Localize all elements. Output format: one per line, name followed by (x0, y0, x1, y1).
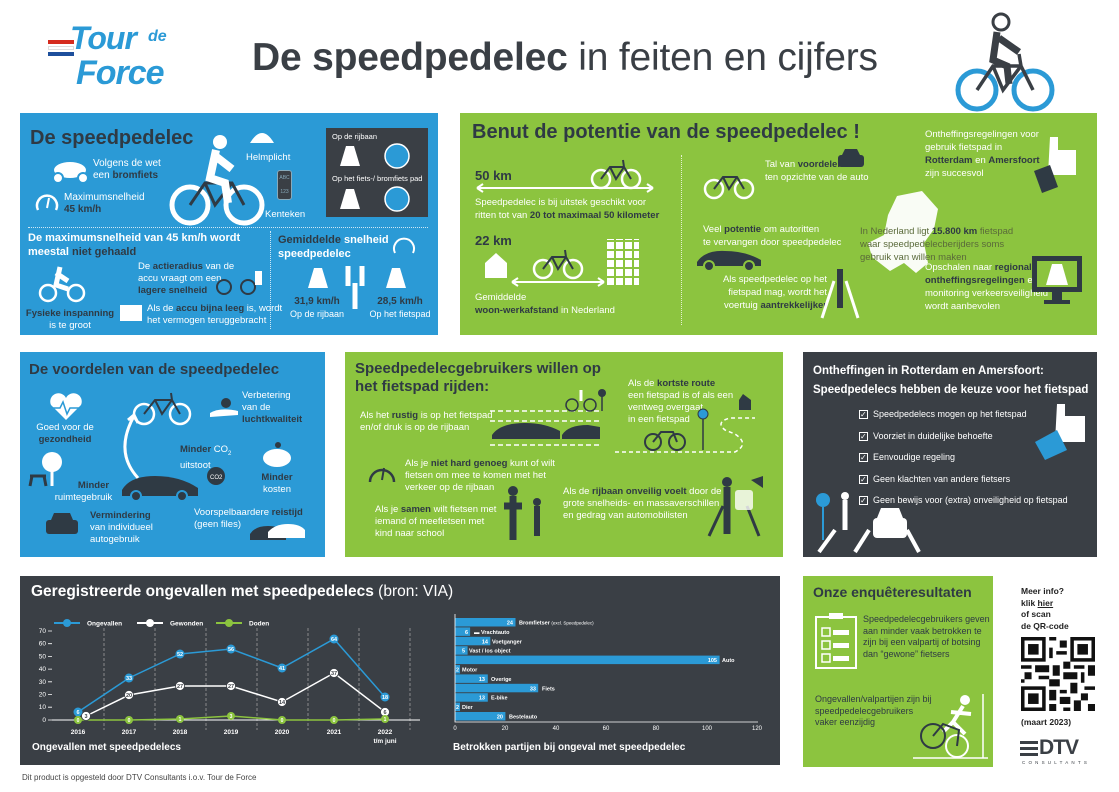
text: woon-werk: woon-werkafstand in Nederland (475, 305, 615, 316)
text: meer info: de QR-code (1021, 620, 1069, 630)
logo: DTV Consultants: DTV (1039, 736, 1078, 759)
heading (813, 362, 1088, 400)
legend (54, 619, 269, 628)
bar chart: 2 (456, 705, 459, 711)
line chart: 14 (279, 700, 286, 706)
line chart: 37 (331, 671, 337, 677)
text: meer info: Meer info? (1021, 586, 1064, 596)
heading: het fietspad rijden: (355, 378, 489, 395)
icon: helmet (250, 133, 274, 143)
heading: Ontheffingen in Rotterdam en Amersfoort: (813, 365, 1044, 377)
checklist: Geen bewijs voor (extra) onveiligheid op fietspad (873, 495, 1068, 505)
checklist: ✓ (860, 432, 867, 440)
text: minder CO2: Minder CO2 (180, 444, 231, 457)
line chart: 2016 (71, 729, 86, 736)
icon: thumbs up (1034, 137, 1076, 193)
icon: road 2 (386, 268, 406, 288)
icon: bike voordelen (132, 390, 192, 426)
bar chart: 24 (507, 620, 514, 626)
text: kortste route: in een fietspad (628, 414, 690, 425)
logo: Tour de Force: Tour (70, 20, 136, 56)
bar chart: 100 (702, 726, 713, 732)
panel: De voordelen (20, 352, 325, 557)
line chart: 41 (279, 666, 285, 672)
bar chart: ▬ Vrachtauto (474, 630, 510, 636)
icon: ebike (216, 271, 262, 295)
icon: monitor (1032, 256, 1084, 306)
text: 50 km desc: ritten tot van 20 tot maximaal 50 kilometer (475, 210, 659, 221)
text: ontheffingsregelingen: gebruik fietspad in (925, 142, 1002, 153)
bar chart: 6 (465, 630, 468, 636)
bar chart: 13 (479, 677, 485, 683)
icon: traffic jam (250, 522, 305, 544)
text: veel potentie: Veel potentie om autoritten (703, 224, 819, 235)
line chart: 0 (128, 718, 131, 724)
text: actieradius: lagere snelheid (138, 285, 207, 296)
line chart: 50 (39, 653, 46, 660)
line chart: 3 (84, 714, 88, 720)
text: enquete 1: Speedpedelecgebruikers geven (863, 614, 990, 624)
checklist (859, 404, 1068, 512)
text: fysieke inspanning: Fysieke inspanning (26, 308, 114, 319)
text: minder kosten (252, 472, 302, 496)
icon: license plate (277, 170, 292, 200)
text: niet hard genoeg: fietsen om mee te komen met het (405, 470, 546, 481)
bar chart: 0 (453, 726, 457, 732)
text: ruimtegebruik: ruimtegebruik (55, 492, 112, 503)
heading: Geregistreerde ongevallen met speedpedelecs (bron: VIA) (31, 583, 453, 600)
text: enquete 2 (815, 694, 932, 728)
line chart: 1 (384, 717, 387, 723)
text: meer info (1021, 586, 1069, 632)
text: gezondheid: gezondheid (39, 434, 91, 445)
icon: bike + arrow + car (697, 176, 761, 270)
bar chart: 80 (653, 726, 660, 732)
panel: enquêteresultaten (803, 576, 993, 767)
line chart: 2022 (378, 729, 393, 736)
checklist: ✓ (860, 474, 867, 484)
text: meer info: klik hier (1021, 598, 1053, 608)
text: luchtkwaliteit: luchtkwaliteit (242, 414, 302, 425)
text: ruimtegebruik (46, 480, 121, 504)
arrow: 50 km (476, 183, 654, 193)
text: kortste route: een fietspad is of als een (628, 390, 733, 401)
line chart: 20 (126, 693, 132, 699)
text: rustig: Als het rustig is op het fietspad (360, 410, 493, 421)
line chart: 27 (228, 684, 234, 690)
bar chart: 20 (502, 726, 509, 732)
text: enquete 1: aan minder vaak betrokken te (863, 626, 982, 636)
text: aantrekkelijker: fietspad mag, wordt het (728, 287, 827, 298)
text: onveilig: grote snelheids- en massaverschillen (563, 498, 719, 509)
checklist: Speedpedelecs mogen op het fietspad (873, 409, 1027, 419)
text: 15.800 km: waar speedpedelecberijders soms (860, 239, 1004, 250)
legend: Gewonden (170, 620, 203, 628)
heading: gemiddelde snelheid: Gemiddelde snelheid (278, 234, 389, 246)
checklist: Geen klachten van andere fietsers (873, 474, 1010, 484)
text: 50 km desc: Speedpedelec is bij uitstek geschikt voor (475, 197, 646, 208)
bar chart: Vast / los object (469, 649, 511, 655)
legend: Ongevallen (87, 620, 122, 628)
text: 28,5 (369, 296, 431, 319)
text: 50 km: 50 km (475, 168, 512, 183)
line chart (20, 576, 780, 765)
heading: De voordelen van de speedpedelec (29, 361, 279, 378)
line chart: 2018 (173, 729, 188, 736)
text: gezondheid: Goed voor de (36, 422, 94, 433)
text: actieradius: accu vraagt om een (138, 273, 221, 284)
checklist: ✓ (860, 496, 867, 505)
text: samen: iemand of meefietsen met (375, 516, 484, 527)
text: opschalen: Opschalen naar regionale (925, 262, 1037, 273)
icon: map NL (868, 191, 938, 273)
line chart: 0 (333, 718, 336, 724)
line chart: 20 (39, 692, 46, 698)
panel: Ontheffingen (803, 352, 1097, 557)
text: luchtkwaliteit: Verbetering (242, 390, 291, 401)
icon: route with bike (615, 394, 755, 456)
line chart: 30 (39, 679, 46, 686)
text: 28,5: 28,5 km/h (377, 296, 423, 307)
icon: license plate: 123 (280, 189, 289, 195)
text: veel potentie (703, 224, 842, 248)
heading: maximumsnelheid (28, 232, 240, 258)
icon: car front (838, 149, 864, 167)
icon: speedometer (36, 194, 58, 210)
heading: gemiddelde snelheid (278, 234, 389, 260)
icon: scooter (54, 162, 87, 182)
text: chart 2 caption: Betrokken partijen bij ongeval met speedpedelec (453, 742, 685, 753)
text: reistijd: (geen files) (194, 519, 241, 530)
text: niet hard genoeg (405, 458, 555, 494)
text: 15.800 km (860, 226, 1013, 263)
text: 22 km: 22 km (475, 233, 512, 248)
line chart: 56 (228, 647, 234, 653)
checklist: ✓ (860, 453, 867, 462)
text: onveilig (563, 486, 721, 522)
text: maart 2023: (maart 2023) (1021, 717, 1071, 727)
text: gezondheid (30, 422, 100, 446)
line chart: 2017 (122, 729, 137, 736)
icon: heart (48, 392, 84, 422)
icon: cyclists group (346, 266, 364, 309)
text: ruimtegebruik: Minder (78, 480, 109, 491)
text: max 45: 45 km/h (64, 204, 101, 215)
checklist: Voorziet in duidelijke behoefte (873, 430, 993, 440)
logo: Tour de Force: de (148, 28, 167, 45)
text: enquete 1: dan “gewone” fietsers (863, 648, 950, 658)
text: veel potentie: te vervangen door speedpedelec (703, 237, 841, 248)
text: opschalen: wordt aanbevolen (925, 301, 1000, 312)
line chart: 10 (39, 704, 46, 711)
text: ontheffingsregelingen: zijn succesvol (925, 168, 984, 179)
text: 15.800 km: gebruik van willen maken (860, 252, 967, 263)
icon: big cyclist (170, 135, 264, 226)
line chart: 2021 (327, 729, 342, 736)
heading: Benut de potentie van de speedpedelec ! (472, 121, 860, 143)
text: 28,5: Op het fietspad (369, 309, 431, 319)
text: ontheffingsregelingen: Ontheffingsregelingen voor (925, 129, 1039, 140)
panel: willen op het fietspad (345, 352, 783, 557)
text: opschalen: ontheffingsregelingen en (925, 275, 1038, 286)
icon: two cyclists (500, 486, 550, 542)
line chart: 70 (39, 628, 46, 635)
text: 15.800 km: In Nederland ligt 15.800 km fietspad (860, 226, 1013, 237)
bar chart: 13 (479, 696, 485, 702)
text: accu: het vermogen teruggebracht (147, 315, 266, 326)
text: 31,9 (290, 296, 344, 319)
text: rustig: en/of druk is op de rijbaan (360, 422, 469, 433)
bar chart: Voetganger (492, 639, 523, 645)
bar chart: 5 (462, 649, 465, 655)
line chart: 0 (42, 717, 46, 724)
box: road signs (326, 128, 428, 217)
icon: battery (120, 305, 142, 321)
checklist: Eenvoudige regeling (873, 452, 955, 462)
text: enquete 1: zijn bij een valpartij of botsing (863, 637, 981, 647)
text: voordelen auto (765, 159, 869, 183)
text: enquete 1 (863, 614, 990, 660)
icon: piggy bank (260, 442, 294, 468)
heading: De speedpedelec (30, 127, 193, 149)
text: opschalen: monitoring verkeersveiligheid (925, 288, 1048, 299)
text: samen (375, 504, 496, 540)
text: reistijd (194, 507, 303, 531)
icon: cyclist with horn (707, 476, 767, 538)
text: opschalen (925, 261, 1048, 313)
heading: Speedpedelecs hebben de keuze voor het fietspad (813, 384, 1088, 396)
checklist: ✓ (860, 410, 867, 419)
line chart: 52 (177, 652, 183, 658)
icon: road bike lane (815, 490, 920, 552)
text: niet hard genoeg: Als je niet hard genoeg kunt of wilt (405, 458, 555, 469)
bar chart: 2 (456, 668, 459, 674)
line chart: 2019 (224, 729, 239, 736)
icon: house (485, 253, 507, 278)
text: enquete 2: vaker eenzijdig (815, 717, 875, 727)
line chart: 0 (77, 718, 80, 724)
text: voordelen auto: Tal van voordelen (765, 159, 843, 170)
text: Helmplicht: Helmplicht (246, 152, 290, 163)
text: vermindering: autogebruik (90, 534, 140, 545)
text: woon-werk (475, 292, 615, 316)
icon: office building (607, 239, 639, 285)
text: chart 1 caption: Ongevallen met speedpedelecs (32, 742, 181, 753)
text: onveilig: en gedrag van automobilisten (563, 510, 688, 521)
text: bromfiets: een bromfiets (93, 170, 158, 181)
icon: road with cars (490, 387, 600, 447)
text: fysieke inspanning (26, 308, 114, 331)
line chart: 3 (230, 714, 233, 720)
text: vermindering: Vermindering (90, 510, 151, 521)
icon: cyclist lane (820, 269, 860, 318)
text: vermindering: van individueel (90, 522, 153, 533)
text: 31,9: Op de rijbaan (290, 309, 344, 319)
text: 31,9: 31,9 km/h (294, 296, 340, 307)
text: enquete 2: Ongevallen/valpartijen zijn bij (815, 694, 932, 704)
text: minder CO2: uitstoot (180, 460, 211, 471)
icon: license plate: ABC (279, 175, 290, 181)
bar chart: Overige (491, 677, 511, 683)
bar chart: 60 (603, 726, 610, 732)
text: luchtkwaliteit (242, 390, 302, 426)
box: road signs: Op het fiets-/ bromfiets pad (332, 174, 422, 183)
line chart: 33 (126, 676, 132, 682)
text: minder CO2 (180, 444, 231, 472)
logo: Tour de Force (48, 20, 167, 92)
text: woon-werk: Gemiddelde (475, 292, 526, 303)
arrow: car to bike (116, 412, 146, 480)
text: voordelen auto: ten opzichte van de auto (765, 172, 869, 183)
bar chart: Auto (722, 658, 735, 664)
heading: Onze enquêteresultaten (813, 584, 972, 600)
line chart: 2020 (275, 729, 290, 736)
text: aantrekkelijker: Als speedpedelec op het (723, 274, 827, 285)
text: max 45 (64, 192, 145, 215)
icon: falling cyclist (913, 694, 988, 759)
text: ontheffingsregelingen (925, 129, 1040, 179)
text: Kenteken: Kenteken (265, 209, 305, 220)
line chart: 0 (281, 718, 284, 724)
line chart: 6 (76, 710, 80, 716)
box: road signs: Op de rijbaan (332, 132, 377, 141)
arrow: 22 km (512, 277, 604, 287)
line chart: 18 (382, 695, 388, 701)
icon: speedometer 3 (367, 460, 397, 484)
text: minder kosten: Minder (261, 472, 293, 483)
text: aantrekkelijker (723, 274, 827, 311)
logo: DTV Consultants (1020, 738, 1100, 768)
text: samen: Als je samen wilt fietsen met (375, 504, 496, 515)
bar chart: Bestelauto (509, 714, 538, 720)
bar chart: Fiets (542, 686, 555, 692)
icon: car front 2 (44, 512, 80, 538)
text: kortste route: ventweg overgaat (628, 402, 703, 413)
heading (355, 360, 601, 396)
line chart: 1 (179, 717, 182, 723)
line chart: 27 (177, 684, 183, 690)
bar chart: Motor (462, 668, 478, 674)
text: accu (147, 303, 282, 326)
icon: cyclist small (38, 266, 86, 302)
icon: QR code (1021, 637, 1095, 711)
line chart: 60 (39, 641, 46, 648)
bar chart: E-bike (491, 696, 508, 702)
line chart: 40 (39, 666, 46, 673)
bar chart: 14 (482, 639, 489, 645)
bar chart: 120 (752, 726, 763, 732)
bar chart: 20 (497, 714, 503, 720)
text: rustig (360, 410, 493, 434)
line chart: 64 (331, 637, 338, 643)
bar chart: Dier (462, 705, 474, 711)
icon: tree bench (30, 452, 66, 487)
text: luchtkwaliteit: van de (242, 402, 271, 413)
line chart: t/m juni (373, 738, 397, 745)
bar chart: Bromfietser (excl. Speedpedelec) (519, 620, 594, 626)
panel: De speedpedelec (20, 113, 438, 335)
text: bromfiets (93, 158, 161, 181)
icon: bike 1 (590, 160, 642, 190)
line chart: 6 (383, 710, 387, 716)
bar chart: 33 (530, 686, 536, 692)
text: aantrekkelijker: voertuig aantrekkelijker (724, 300, 827, 311)
icon: thumbs up blue (1033, 402, 1088, 462)
icon: car side + CO2: CO2 (210, 475, 223, 481)
text: max 45: Maximumsnelheid (64, 192, 145, 203)
footer text: Dit product is opgesteld door DTV Consultants i.o.v. Tour de Force (22, 773, 256, 782)
icon: car side + CO2 (120, 470, 230, 502)
icon: road 1 (308, 268, 328, 288)
text: samen: kind naar school (375, 528, 444, 539)
bar chart: 105 (708, 658, 717, 664)
bar chart: 40 (553, 726, 560, 732)
heading: gemiddelde snelheid: speedpedelec (278, 248, 351, 260)
panel: ongevallen chart (20, 576, 780, 765)
icon: speedometer 2 (392, 238, 416, 254)
logo: DTV Consultants: CONSULTANTS (1022, 760, 1090, 765)
text: enquete 2: speedpedelecgebruikers (815, 706, 913, 716)
heading: Speedpedelecgebruikers willen op (355, 360, 601, 377)
text: bromfiets: Volgens de wet (93, 158, 161, 169)
logo: Tour de Force: Force (76, 54, 164, 92)
title: De speedpedelec in feiten en cijfers (252, 36, 878, 79)
icon: bike 2 (532, 250, 584, 280)
icon: cyclist header (956, 12, 1054, 112)
text: actieradius (138, 261, 234, 296)
text: 50 km desc (475, 197, 660, 221)
text: actieradius: De actieradius van de (138, 261, 234, 272)
text: onveilig: Als de rijbaan onveilig voelt door de (563, 486, 721, 497)
heading: maximumsnelheid: meestal niet gehaald (28, 246, 136, 258)
text: minder kosten: kosten (263, 484, 291, 495)
text: kortste route (628, 378, 733, 426)
text: kortste route: Als de kortste route (628, 378, 715, 389)
text: niet hard genoeg: verkeer op de rijbaan (405, 482, 494, 493)
text: meer info: of scan (1021, 609, 1051, 619)
legend: Doden (249, 620, 269, 628)
icon: leaf hand (210, 397, 240, 417)
text: fysieke inspanning: is te groot (49, 320, 91, 331)
bar chart (20, 576, 780, 765)
icon: clipboard (815, 613, 857, 669)
panel: Benut de potentie (460, 113, 1097, 335)
text: accu: Als de accu bijna leeg is, wordt (147, 303, 282, 314)
heading: maximumsnelheid: De maximumsnelheid van 45 km/h wordt (28, 232, 240, 244)
text: vermindering (90, 510, 153, 546)
text: reistijd: Voorspelbaardere reistijd (194, 507, 303, 518)
text: ontheffingsregelingen: Rotterdam en Amersfoort (925, 155, 1040, 166)
